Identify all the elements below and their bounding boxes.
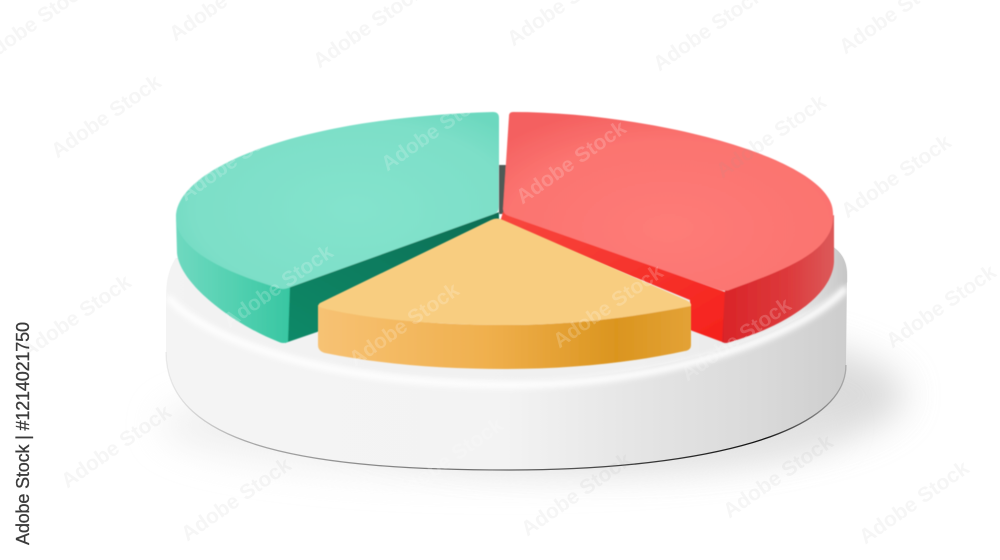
stock watermark: Adobe Stock	[882, 260, 1000, 353]
white base disc	[166, 247, 847, 470]
red outer wall	[722, 215, 834, 343]
watermark over chart: Adobe Stock	[512, 116, 631, 209]
stock watermark: Adobe Stock	[517, 448, 636, 541]
watermark over chart: Adobe Stock	[377, 83, 496, 176]
watermark over chart: Adobe Stock	[677, 293, 796, 386]
watermark over chart: Adobe Stock	[219, 240, 338, 333]
base top surface	[167, 247, 847, 380]
stock watermark: Adobe Stock	[177, 453, 296, 546]
stock watermark: Adobe Stock	[57, 400, 176, 493]
stock watermark: Adobe Stock	[17, 270, 136, 363]
watermark over chart: Adobe Stock	[345, 278, 464, 371]
teal inner wall	[283, 212, 499, 343]
red top surface	[503, 112, 833, 291]
ground shadow	[160, 323, 905, 475]
slice: yellow	[318, 218, 691, 369]
stock watermark: Adobe Stock	[855, 456, 974, 549]
watermark over chart: Adobe Stock	[549, 260, 668, 353]
stock watermark: Adobe Stock	[47, 70, 166, 163]
stock id caption: Adobe Stock | #1214021750	[13, 322, 33, 545]
stock watermark: Adobe Stock	[712, 90, 831, 183]
teal outer wall	[176, 217, 290, 343]
watermark over chart	[175, 83, 796, 506]
slice: teal	[176, 112, 499, 343]
red inner wall	[500, 212, 725, 343]
watermark over chart: Adobe Stock	[175, 113, 294, 206]
stock watermark: Adobe Stock	[837, 130, 956, 223]
stock watermark: Adobe Stock	[719, 430, 838, 523]
yellow side wall	[318, 305, 691, 369]
base side wall	[166, 247, 847, 470]
slice: red	[499, 112, 834, 343]
teal top surface	[176, 112, 499, 289]
gap shadow	[499, 165, 506, 214]
yellow top surface	[318, 218, 691, 325]
watermark over chart: Adobe Stock	[389, 413, 508, 506]
